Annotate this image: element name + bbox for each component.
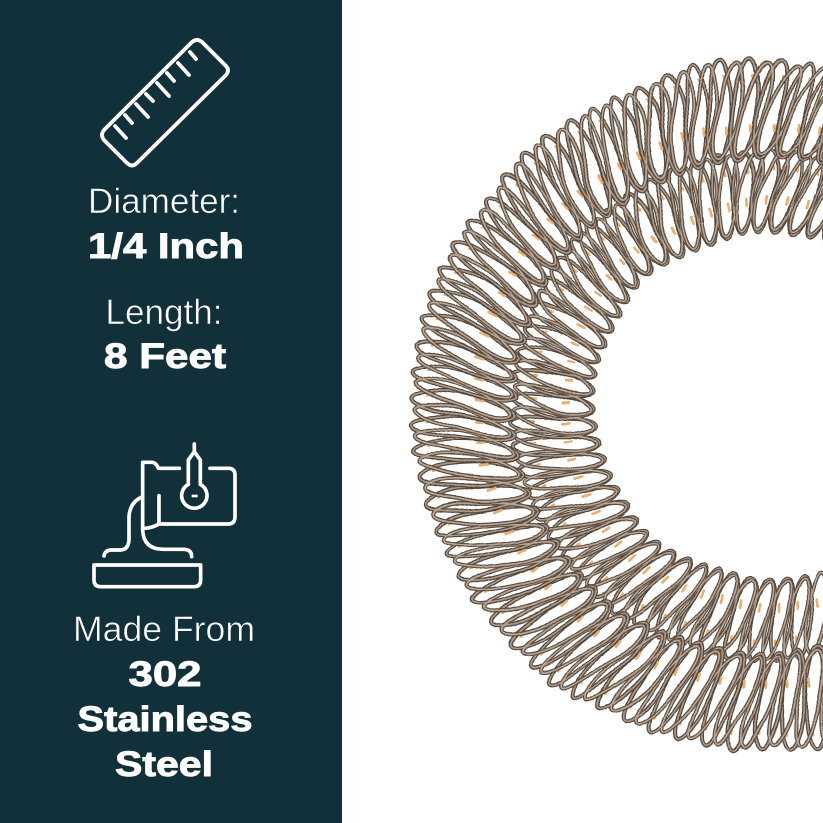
icon: ruler [102,40,228,166]
panel: dark teal specifications sidebar [0,0,342,823]
text: material value: Stainless [78,700,252,739]
text: material value [78,655,252,784]
text: diameter value: 1/4 Inch [88,227,244,266]
photo: coiled stainless steel spring [408,58,823,754]
icon: spring manufacturing machine [94,444,235,587]
outer spring ring [408,58,823,754]
text: material label: Made From [73,610,255,649]
text: length label: Length: [106,293,222,332]
text: diameter label: Diameter: [88,182,240,221]
text: length value: 8 Feet [104,337,226,376]
text: material value: 302 [128,655,202,694]
text: material value: Steel [115,745,213,784]
inner spring ring [507,148,823,665]
